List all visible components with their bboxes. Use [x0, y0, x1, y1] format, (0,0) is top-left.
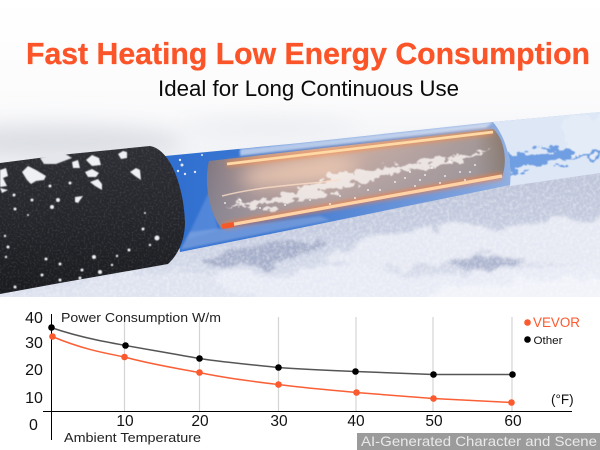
x axis labels: 50: [425, 413, 443, 430]
x axis labels: 40: [347, 413, 365, 430]
y axis labels: 20: [25, 362, 43, 379]
x axis labels: 30: [270, 413, 288, 430]
series: VEVOR: [49, 333, 515, 406]
title: Fast Heating Low Energy Consumption: [26, 36, 590, 71]
legend: VEVOR: [533, 315, 580, 330]
AI notice strip: AI-Generated Character and Scene: [361, 433, 597, 449]
x axis labels: 60: [504, 413, 522, 430]
frosted pipe end: [493, 112, 600, 186]
unit label: (°F): [551, 392, 574, 407]
snow flakes on foam: [0, 151, 160, 288]
legend: Other: [534, 335, 563, 347]
chart panel: [0, 297, 600, 450]
glass window: [207, 129, 505, 228]
axes: [43, 314, 572, 440]
x axis labels: 20: [191, 413, 209, 430]
x axis labels: 10: [116, 413, 134, 430]
y axis labels: 40: [25, 310, 43, 327]
frost specks in glass: [224, 161, 476, 209]
blue pipe body: [165, 112, 600, 252]
series: other: [48, 324, 516, 378]
heating cable pipe: [0, 112, 600, 300]
y axis labels: 10: [25, 390, 43, 407]
axis title: ambient temperature: Ambient Temperature: [64, 430, 201, 445]
subtitle: Ideal for Long Continuous Use: [158, 76, 459, 101]
photo background: snowy scene: [0, 110, 600, 297]
legend: [524, 315, 580, 347]
y axis labels: 30: [25, 335, 43, 352]
y axis labels: [25, 310, 43, 434]
y axis labels: 0: [29, 417, 38, 434]
vertical grid lines: [124, 317, 512, 411]
x axis labels: [116, 413, 522, 430]
heating wires: [222, 132, 502, 226]
axis title: power consumption: Power Consumption W/m: [61, 310, 221, 325]
black foam insulation: [0, 146, 185, 294]
